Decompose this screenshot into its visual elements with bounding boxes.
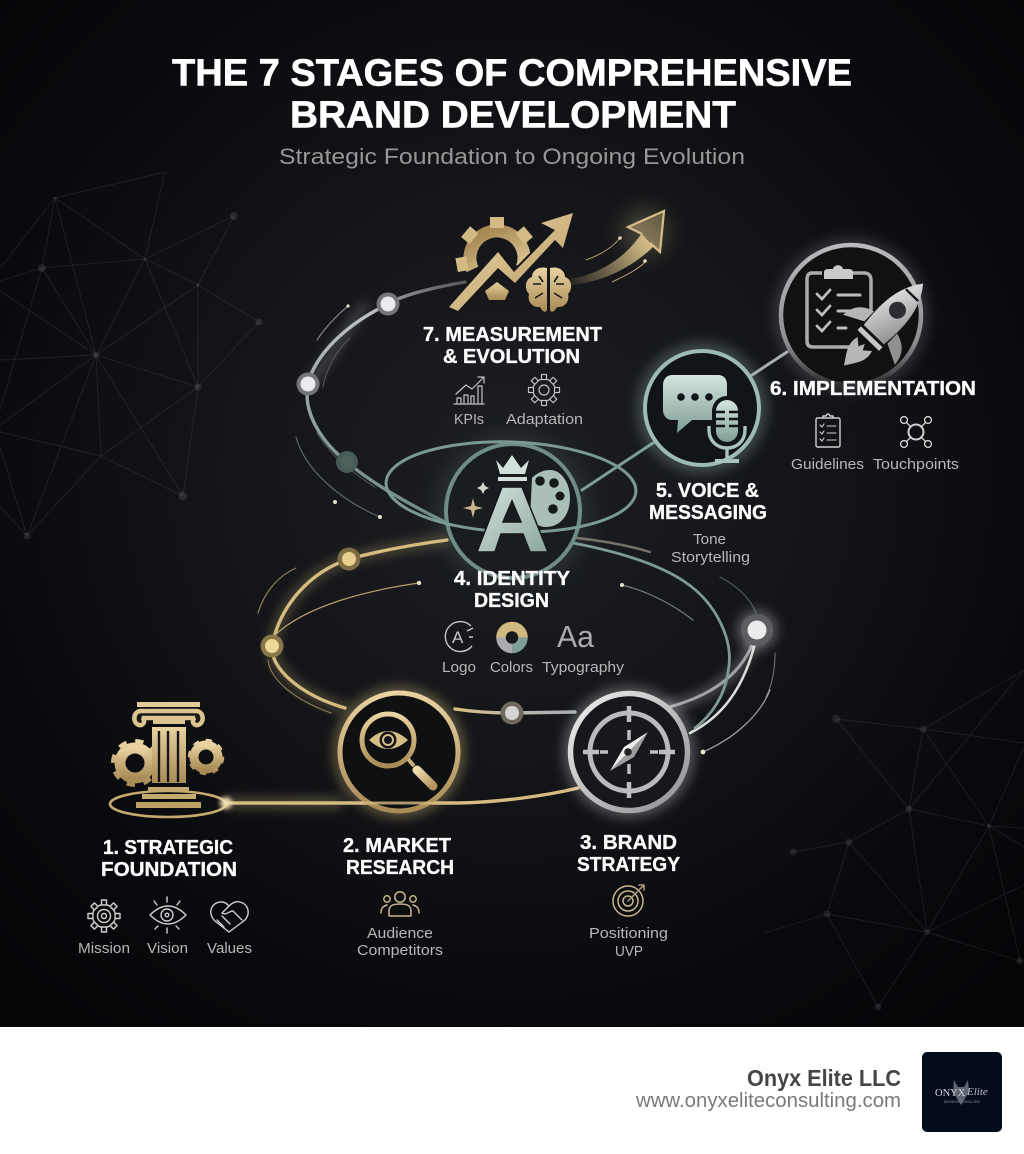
icon: speech bubble and microphone xyxy=(636,342,768,474)
heading: 2. MARKET xyxy=(343,834,451,857)
decorative network left xyxy=(0,172,262,540)
company logo: BUSINESS CONSULTING xyxy=(944,1100,980,1104)
website url: www.onyxeliteconsulting.com xyxy=(635,1090,901,1112)
icon: checklist and rocket xyxy=(773,237,949,393)
panel: stage 2 market research xyxy=(333,686,465,959)
label: kpis adaptation: Adaptation xyxy=(506,411,583,428)
label: audience competitors xyxy=(357,925,443,959)
company logo xyxy=(922,1052,1002,1132)
heading: STRATEGY xyxy=(577,853,680,876)
heading: 7. MEASUREMENT xyxy=(423,323,602,346)
panel: stage 1 strategic foundation xyxy=(78,702,252,957)
heading xyxy=(423,323,602,368)
heading xyxy=(577,831,680,876)
heading: 3. BRAND xyxy=(580,831,677,854)
icon: crowned A with palette xyxy=(385,437,637,585)
heading xyxy=(454,567,570,612)
icon: logo mark: A xyxy=(452,628,464,647)
icon: vision eye xyxy=(150,897,186,933)
icon: mission gear xyxy=(88,900,120,932)
label: positioning uvp: Positioning xyxy=(589,925,668,942)
arrow: evolution trail xyxy=(570,210,667,285)
panel: stage 4 identity design xyxy=(385,437,637,676)
icon: column with gears xyxy=(110,702,232,817)
heading: MESSAGING xyxy=(649,501,767,524)
label: guidelines touchpoints: Guidelines xyxy=(791,456,864,473)
decorative network right xyxy=(764,670,1024,1010)
heading xyxy=(101,836,237,881)
label: mission vision values: Values xyxy=(207,940,252,957)
icon: typography: Aa xyxy=(557,619,595,654)
panel: stage 7 measurement and evolution xyxy=(423,210,667,428)
label: logo colors typography xyxy=(442,659,625,676)
heading: FOUNDATION xyxy=(101,858,237,881)
label: kpis adaptation xyxy=(454,411,583,428)
subtitle: Strategic Foundation to Ongoing Evolution xyxy=(279,144,745,169)
label: tone storytelling xyxy=(671,531,750,566)
heading: RESEARCH xyxy=(346,856,454,879)
label: logo colors typography: Typography xyxy=(542,659,625,676)
icon: guidelines clipboard xyxy=(816,414,840,447)
label: tone storytelling: Storytelling xyxy=(671,549,750,566)
icon: gear, growth arrow and brain xyxy=(449,213,573,312)
label: audience competitors: Competitors xyxy=(357,942,443,959)
icon: audience xyxy=(381,892,419,916)
label: logo colors typography: Colors xyxy=(490,659,533,676)
label: kpis adaptation: KPIs xyxy=(454,411,484,428)
heading: 1. STRATEGIC xyxy=(103,836,233,859)
icon: touchpoints network xyxy=(901,417,931,447)
label: positioning uvp xyxy=(589,925,668,960)
company name: Onyx Elite LLC xyxy=(747,1065,901,1091)
journey path connectors xyxy=(228,282,787,803)
heading: 6. IMPLEMENTATION xyxy=(770,377,976,400)
icon: compass in circle xyxy=(563,686,695,818)
icon: magnifier in circle xyxy=(333,686,465,818)
label: guidelines touchpoints: Touchpoints xyxy=(873,456,959,473)
company logo: ONYX xyxy=(935,1088,966,1099)
title xyxy=(172,52,852,136)
label: logo colors typography: Logo xyxy=(442,659,476,676)
footer bar xyxy=(0,1027,1024,1154)
heading xyxy=(649,479,767,524)
heading: 4. IDENTITY xyxy=(454,567,570,590)
panel: stage 3 brand strategy xyxy=(563,686,695,960)
icon: adaptation gear xyxy=(528,374,560,406)
heading: DESIGN xyxy=(474,589,549,612)
node markers xyxy=(260,292,777,724)
label: tone storytelling: Tone xyxy=(693,531,726,548)
title: THE 7 STAGES OF COMPREHENSIVE xyxy=(172,52,852,94)
title: BRAND DEVELOPMENT xyxy=(290,94,736,136)
label: mission vision values: Mission xyxy=(78,940,130,957)
icon: values heart handshake xyxy=(211,902,248,932)
panel: stage 6 implementation xyxy=(770,237,976,473)
icon: kpi chart xyxy=(454,377,484,404)
heading xyxy=(343,834,454,879)
heading: 5. VOICE & xyxy=(656,479,759,502)
company logo: Elite xyxy=(966,1086,988,1098)
panel: stage 5 voice and messaging xyxy=(636,342,768,566)
label: positioning uvp: UVP xyxy=(615,943,643,960)
icon: target xyxy=(613,885,644,916)
label: audience competitors: Audience xyxy=(367,925,433,942)
label: mission vision values xyxy=(78,940,252,957)
icon: logo mark xyxy=(445,622,473,652)
label: mission vision values: Vision xyxy=(147,940,188,957)
label: guidelines touchpoints xyxy=(791,456,959,473)
icon: colors donut xyxy=(501,626,523,648)
heading: & EVOLUTION xyxy=(443,345,580,368)
